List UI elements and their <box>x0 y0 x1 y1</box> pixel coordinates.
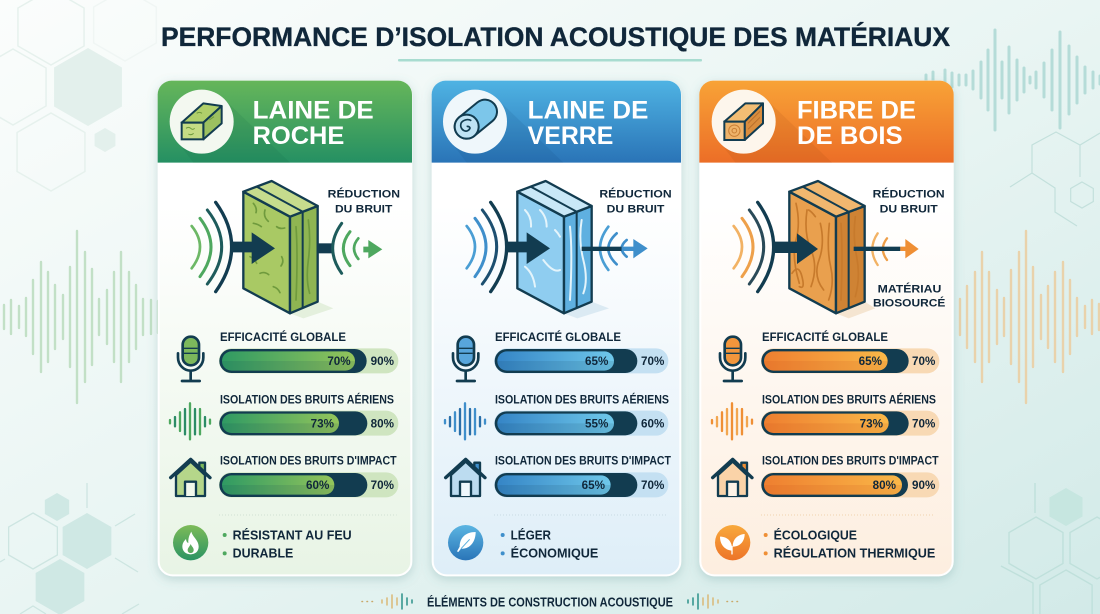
header band <box>699 81 954 163</box>
icon: rock wool brick <box>170 90 234 154</box>
heading: fibre de bois <box>797 96 916 150</box>
label: réduction du bruit: DU BRUIT <box>335 203 392 215</box>
metric: bruits d'impact: 70% <box>641 479 665 492</box>
metric: bruits aériens <box>219 391 398 436</box>
metric: bruits d'impact: ISOLATION DES BRUITS D'IMPACT <box>220 454 397 468</box>
header band <box>432 81 681 163</box>
icon: microphone <box>453 337 478 381</box>
heading: laine de verre: LAINE DE <box>528 96 648 124</box>
background waveform orange <box>960 231 1099 403</box>
metric: bruits d'impact <box>761 454 939 497</box>
icon: glass wool roll <box>443 90 507 154</box>
metric: bruits d'impact: 60% <box>306 479 330 492</box>
card body <box>433 81 680 575</box>
metric: efficacité globale: 90% <box>371 355 395 368</box>
card body <box>159 81 411 575</box>
heading: fibre de bois: FIBRE DE <box>797 96 916 124</box>
background molecule top right <box>1010 132 1100 226</box>
background waveform teal <box>926 30 1100 130</box>
metrics <box>445 329 672 561</box>
metric: bruits aériens: 55% <box>585 417 609 430</box>
metric: bruits d'impact: 80% <box>873 479 897 492</box>
feature list <box>501 527 599 561</box>
metric: bruits d'impact: 70% <box>371 479 395 492</box>
background hexagons bottom right <box>1001 483 1100 614</box>
footer waveform right <box>688 594 738 609</box>
footer text: ÉLÉMENTS DE CONSTRUCTION ACOUSTIQUE <box>427 594 673 610</box>
feature list: RÉGULATION THERMIQUE <box>774 546 936 561</box>
icon: sound wave <box>712 403 752 439</box>
card body <box>700 81 953 575</box>
metric: bruits aériens <box>494 391 669 436</box>
label: réduction du bruit: DU BRUIT <box>880 203 938 215</box>
heading: laine de verre <box>528 96 648 150</box>
feature list: RÉSISTANT AU FEU <box>233 527 352 542</box>
header shadow <box>453 98 563 163</box>
metric: bruits aériens: ISOLATION DES BRUITS AÉRIENS <box>762 391 936 406</box>
panel: laine de verre <box>432 81 681 575</box>
diagram: sound through rock wool <box>192 181 382 318</box>
metric: efficacité globale <box>761 329 939 373</box>
icon: wood block <box>712 90 776 154</box>
feature list: ÉCONOMIQUE <box>511 546 599 561</box>
background hexagons bottom left <box>0 483 139 614</box>
metric: bruits aériens <box>761 391 939 436</box>
label: matériau biosourcé: MATÉRIAU <box>878 283 941 296</box>
label: réduction du bruit: RÉDUCTION <box>328 187 400 200</box>
metric: bruits aériens: 73% <box>860 417 884 430</box>
label: réduction du bruit <box>328 187 400 215</box>
metric: bruits d'impact <box>219 454 398 497</box>
metric: efficacité globale <box>494 329 668 373</box>
metrics <box>170 329 398 561</box>
background hexagons top left <box>0 0 156 191</box>
metric: bruits aériens: 70% <box>912 417 936 430</box>
icon: microphone <box>720 337 745 381</box>
title: PERFORMANCE D’ISOLATION ACOUSTIQUE DES MATÉRIAUX <box>161 22 950 52</box>
metric: efficacité globale: 70% <box>641 355 665 368</box>
label: réduction du bruit: RÉDUCTION <box>599 187 672 200</box>
feature list: LÉGER <box>511 527 552 542</box>
metric: bruits aériens: 73% <box>311 417 335 430</box>
metric: efficacité globale: 65% <box>859 355 883 368</box>
feature list <box>223 527 352 561</box>
heading: laine de roche <box>253 96 374 150</box>
heading: laine de roche: ROCHE <box>253 122 344 150</box>
metrics <box>712 329 939 561</box>
icon: sound wave <box>445 403 485 439</box>
diagram: sound through glass wool <box>467 181 648 318</box>
icon: microphone <box>178 337 203 381</box>
panel: fibre de bois <box>699 81 954 575</box>
metric: efficacité globale <box>219 329 398 373</box>
header shadow <box>722 98 832 163</box>
label: matériau biosourcé: BIOSOURCÉ <box>873 297 946 310</box>
label: réduction du bruit <box>599 187 672 215</box>
metric: efficacité globale: EFFICACITÉ GLOBALE <box>762 329 888 344</box>
label: réduction du bruit: RÉDUCTION <box>873 187 945 200</box>
metric: efficacité globale: 70% <box>912 355 936 368</box>
heading: laine de roche: LAINE DE <box>253 96 374 124</box>
label: réduction du bruit: DU BRUIT <box>607 203 664 215</box>
metric: bruits d'impact: 65% <box>582 479 606 492</box>
header band <box>158 81 412 163</box>
icon: sound wave <box>170 403 210 439</box>
metric: bruits d'impact: 90% <box>912 479 936 492</box>
panel: laine de roche <box>158 81 412 575</box>
footer waveform left <box>362 594 412 609</box>
icon: feather <box>448 525 483 560</box>
icon: leaves <box>715 525 750 560</box>
icon: house <box>713 459 752 496</box>
metric: efficacité globale: EFFICACITÉ GLOBALE <box>220 329 346 344</box>
metric: bruits d'impact <box>494 454 672 497</box>
metric: bruits d'impact: ISOLATION DES BRUITS D'IMPACT <box>762 454 939 468</box>
metric: bruits d'impact: ISOLATION DES BRUITS D'IMPACT <box>495 454 672 468</box>
title underline <box>398 59 702 62</box>
feature list: DURABLE <box>233 546 294 561</box>
heading: laine de verre: VERRE <box>528 122 613 150</box>
metric: bruits aériens: ISOLATION DES BRUITS AÉRIENS <box>220 391 394 406</box>
icon: flame <box>173 525 208 560</box>
metric: bruits aériens: 80% <box>371 417 395 430</box>
label: réduction du bruit <box>873 187 945 215</box>
background waveform green <box>4 231 158 403</box>
metric: bruits aériens: ISOLATION DES BRUITS AÉRIENS <box>495 391 669 406</box>
feature list <box>764 527 936 561</box>
icon: house <box>171 459 210 496</box>
heading: fibre de bois: DE BOIS <box>797 122 903 150</box>
metric: efficacité globale: EFFICACITÉ GLOBALE <box>495 329 621 344</box>
metric: bruits aériens: 60% <box>641 417 665 430</box>
diagram: sound through wood fibre <box>734 181 919 318</box>
icon: house <box>446 459 485 496</box>
feature list: ÉCOLOGIQUE <box>774 527 857 542</box>
metric: efficacité globale: 70% <box>327 355 351 368</box>
label: matériau biosourcé <box>873 283 946 310</box>
metric: efficacité globale: 65% <box>585 355 609 368</box>
header shadow <box>180 98 290 163</box>
